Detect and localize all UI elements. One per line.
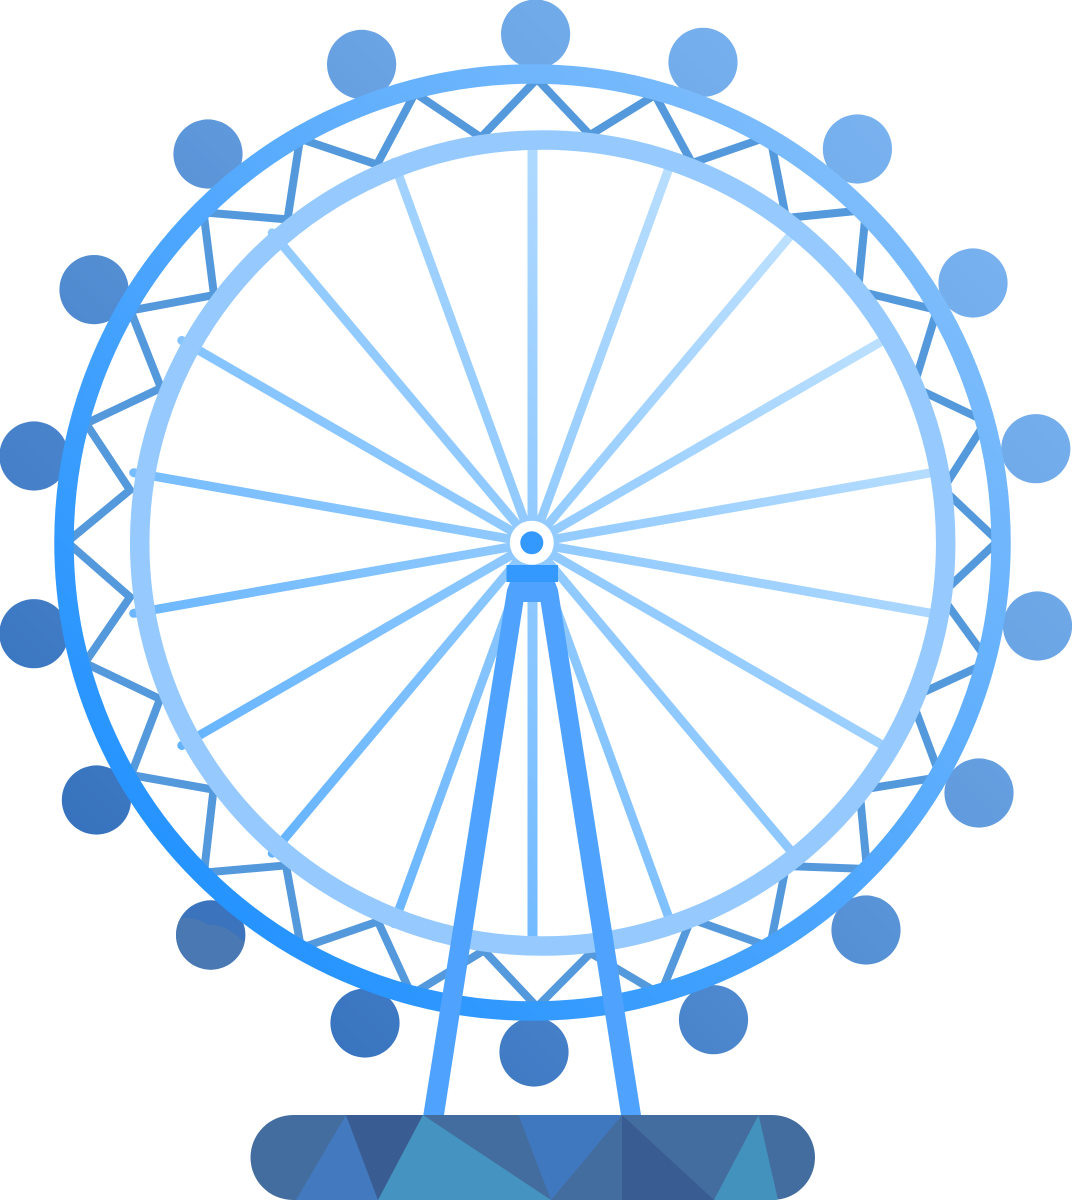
inner ring	[140, 140, 946, 946]
spokes: left side	[134, 162, 532, 924]
gondola: 20 degrees	[668, 28, 738, 97]
gondola: 300 degrees	[59, 255, 129, 324]
gondola: 160 degrees	[679, 985, 748, 1054]
base facet: dark left	[346, 1115, 423, 1200]
gondola: 340 degrees	[327, 30, 396, 99]
base facet: blue left	[296, 1115, 378, 1200]
truss zigzag between rings	[67, 79, 998, 1007]
gondola: 220 degrees, two-tone	[176, 900, 246, 970]
axle platform	[506, 565, 558, 582]
base facet: dark right	[622, 1115, 714, 1200]
gondola: 100 degrees	[1003, 591, 1072, 661]
gondola: 80 degrees	[1001, 414, 1070, 483]
gondola: bottom	[499, 1017, 569, 1087]
gondola: 320 degrees	[173, 119, 243, 189]
spoke: vertical up	[528, 138, 538, 543]
spoke: vertical down	[528, 543, 538, 948]
outer ring	[64, 74, 1001, 1011]
gondola: 120 degrees	[944, 758, 1014, 828]
gondola: top	[501, 0, 570, 69]
gondola: 200 degrees	[330, 988, 400, 1058]
gondola: 280 degrees	[0, 421, 68, 491]
hub	[510, 521, 554, 565]
gondola: 140 degrees	[831, 895, 901, 965]
spokes: right side	[532, 162, 931, 924]
gondola: 60 degrees	[938, 248, 1008, 318]
base facet: blue centre	[518, 1115, 622, 1200]
support legs	[423, 582, 641, 1115]
spokes	[134, 138, 931, 948]
gondola: 240 degrees	[62, 765, 131, 835]
gondola: 40 degrees	[823, 114, 892, 184]
base facet: teal right	[714, 1115, 778, 1200]
base facet: teal centre	[378, 1115, 551, 1200]
gondola: 260 degrees	[0, 599, 68, 668]
base	[250, 1115, 815, 1200]
